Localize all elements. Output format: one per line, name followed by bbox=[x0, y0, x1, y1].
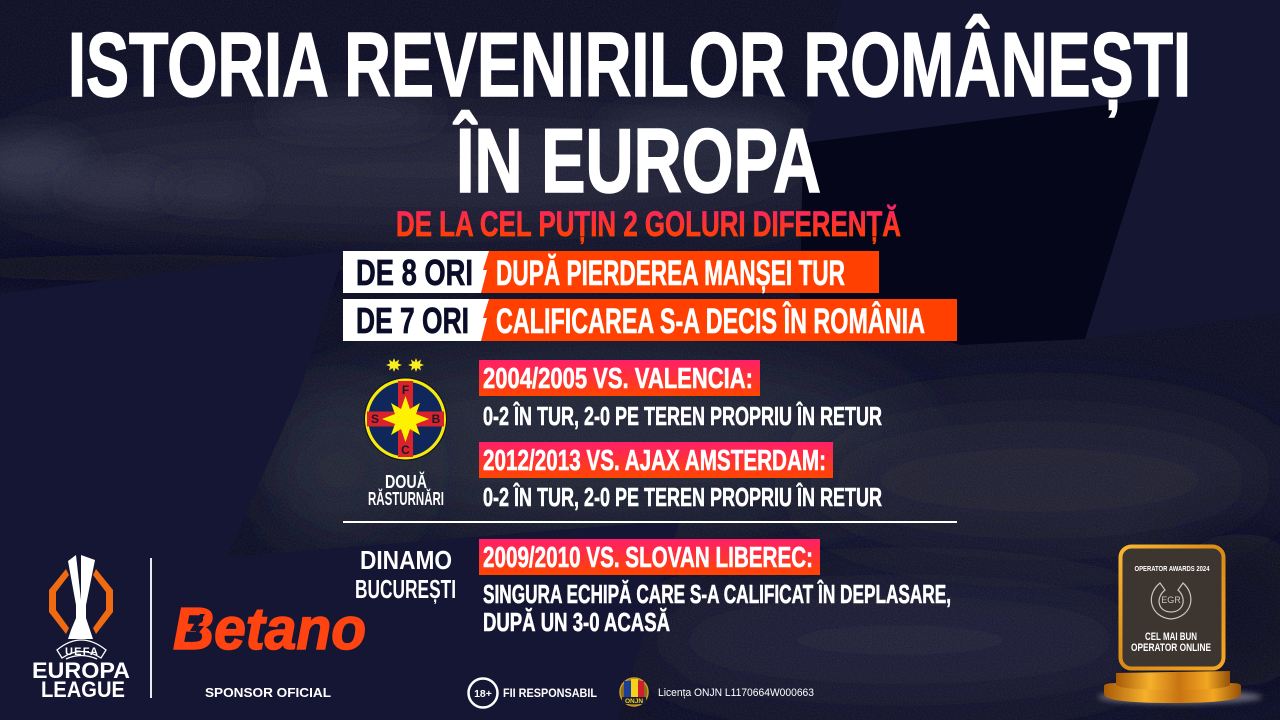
team label: Dinamo: DINAMO bbox=[360, 545, 452, 575]
icon: FCSB crest: F bbox=[402, 383, 409, 397]
stat bar: de 8 ori: DE 8 ORI bbox=[356, 252, 473, 293]
logo: Betano: Betano bbox=[173, 596, 366, 662]
license text: Licența ONJN L1170664W000663 bbox=[658, 687, 814, 699]
sponsor label: SPONSOR OFICIAL bbox=[205, 685, 331, 700]
award trophy: CEL MAI BUN bbox=[1145, 631, 1197, 643]
responsible gaming badge: 18+ bbox=[474, 688, 492, 700]
crest caption: DOUĂ bbox=[385, 471, 427, 492]
team label: Dinamo: BUCUREȘTI bbox=[355, 574, 456, 604]
crest caption: RĂSTURNĂRI bbox=[368, 488, 444, 509]
match: Valencia: 0-2 ÎN TUR, 2-0 PE TEREN PROPRIU ÎN RETUR bbox=[483, 401, 882, 431]
match: Slovan Liberec: SINGURA ECHIPĂ CARE S-A CALIFICAT ÎN DEPLASARE, bbox=[483, 579, 951, 609]
stat bar: de 7 ori: CALIFICAREA S-A DECIS ÎN ROMÂNIA bbox=[496, 301, 925, 341]
ONJN emblem bbox=[620, 678, 648, 706]
match: Valencia: 2004/2005 VS. VALENCIA: bbox=[483, 363, 753, 395]
award trophy: OPERATOR AWARDS 2024 bbox=[1134, 566, 1210, 573]
icon: FCSB crest: B bbox=[432, 412, 441, 426]
stat bar: de 8 ori bbox=[343, 251, 879, 293]
title bbox=[68, 14, 1191, 212]
match: Ajax bbox=[479, 442, 882, 512]
title: ÎN EUROPA bbox=[453, 110, 821, 212]
logo: UEFA Europa League: EUROPA bbox=[32, 658, 130, 683]
top-right navy plane bbox=[803, 0, 1280, 339]
responsible gaming badge: FII RESPONSABIL bbox=[503, 688, 597, 700]
match: Ajax: 2012/2013 VS. AJAX AMSTERDAM: bbox=[483, 445, 826, 477]
match: Slovan Liberec: DUPĂ UN 3-0 ACASĂ bbox=[483, 607, 670, 637]
award trophy bbox=[1098, 546, 1262, 704]
ONJN emblem: ONJN bbox=[625, 698, 643, 705]
crest caption bbox=[368, 471, 444, 509]
left navy plane bbox=[0, 250, 680, 720]
logo: UEFA Europa League: LEAGUE bbox=[41, 677, 125, 702]
stat bar: de 8 ori: DUPĂ PIERDEREA MANȘEI TUR bbox=[496, 254, 845, 293]
responsible gaming badge bbox=[468, 678, 597, 708]
stat bar: de 7 ori: DE 7 ORI bbox=[356, 300, 469, 341]
match: Ajax: 0-2 ÎN TUR, 2-0 PE TEREN PROPRIU ÎN RETUR bbox=[483, 482, 882, 512]
dark wedge bbox=[800, 98, 1160, 345]
match: Slovan Liberec: 2009/2010 VS. SLOVAN LIBEREC: bbox=[483, 542, 813, 574]
logo: UEFA Europa League bbox=[32, 555, 130, 702]
award trophy: OPERATOR ONLINE bbox=[1131, 642, 1211, 654]
icon: FCSB crest: C bbox=[401, 443, 410, 457]
match: Slovan Liberec bbox=[479, 539, 951, 637]
icon: FCSB crest: S bbox=[371, 412, 379, 426]
stat bar: de 7 ori bbox=[343, 299, 957, 341]
subtitle: DE LA CEL PUȚIN 2 GOLURI DIFERENȚĂ bbox=[396, 205, 901, 244]
match: Valencia bbox=[479, 360, 882, 431]
icon: FCSB crest bbox=[364, 358, 446, 460]
award trophy: EGR bbox=[1161, 595, 1181, 605]
team label: Dinamo bbox=[355, 545, 456, 604]
logo: UEFA Europa League: UEFA bbox=[65, 646, 98, 658]
